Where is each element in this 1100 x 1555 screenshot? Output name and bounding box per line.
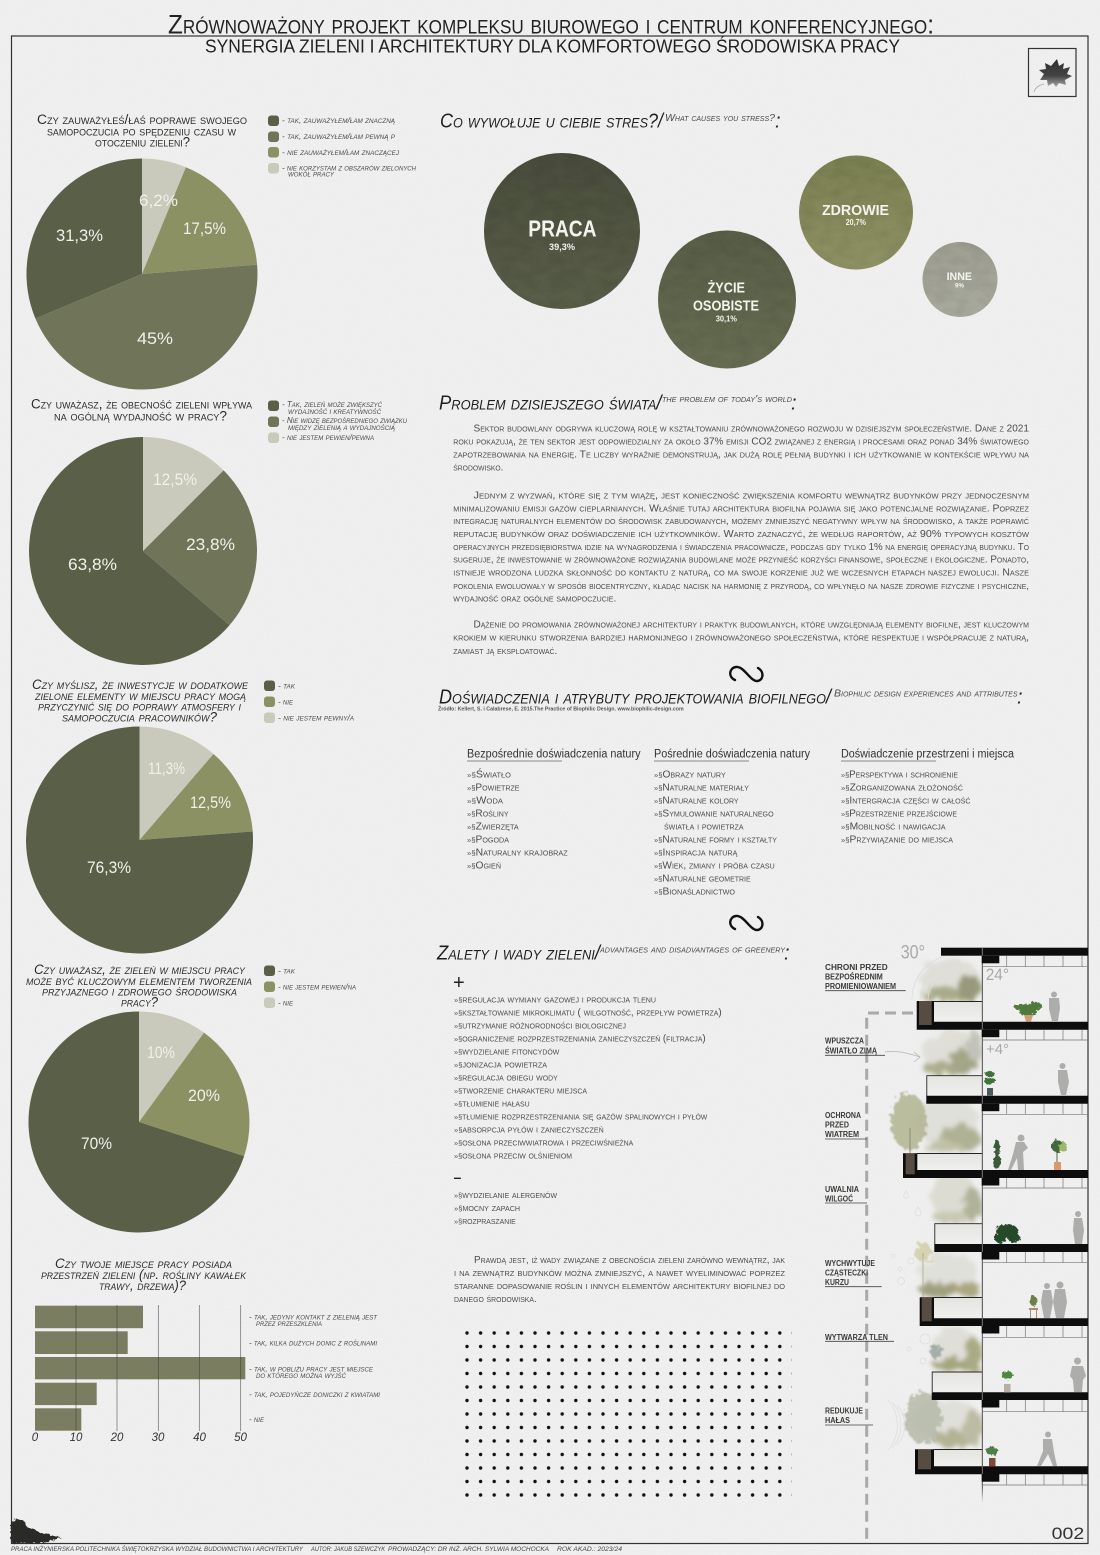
benefit labels: ŚWIATŁO ZIMĄ (825, 1046, 877, 1055)
bar chart labels: - nie (249, 1415, 265, 1424)
benefit labels: UWALNIA (825, 1185, 859, 1194)
bar chart labels: - tak, pojedyńcze doniczki z kwiatami (249, 1390, 380, 1399)
bar chart: 0 (32, 1432, 39, 1444)
minus sign: – (454, 1169, 462, 1185)
list: advantages: »§jonizacja powietrza (454, 1059, 547, 1070)
list: disadvantages: »§rozpraszanie (454, 1216, 516, 1227)
list: direct experiences: »§Naturalny krajobraz (467, 847, 568, 858)
benefit labels: WYTWARZA TLEN (825, 1333, 888, 1342)
text block: problem paragraphs: roku pokazują, że ten sektor jest odpowiedzialny za około 37% emisji CO2 związanej z energią i procesami oraz ponad 34% światowego (453, 436, 1030, 448)
dashed site line (867, 1013, 913, 1543)
bar chart: 30 (152, 1432, 165, 1444)
heading: question 4: pracy? (121, 995, 158, 1010)
bar chart labels: - tak, kilka dużych donic z roślinami (249, 1338, 377, 1347)
pie chart: question 3: 12,5% (190, 793, 231, 812)
list: advantages: »§ograniczenie rozprzestrzeniania zanieczyszczeń (filtracja) (454, 1033, 706, 1044)
dot grid (465, 1326, 792, 1502)
list: indirect experiences (654, 749, 810, 897)
list: indirect experiences: światła i powietrza (664, 821, 744, 832)
text block: problem paragraphs: środowisko. (453, 462, 503, 474)
text block: problem paragraphs: wydajność oraz ogólne samopoczucie. (453, 594, 616, 605)
temperature labels: 30° (901, 942, 925, 963)
icon: leaf in box (1028, 48, 1076, 96)
text block: problem paragraphs: Sektor budowlany odgrywa kluczową rolę w kształtowaniu zrównoważonego rozwoju w dzisiejszym społeczeństwie. Dane z 2021 (474, 424, 1029, 434)
list: direct experiences: »§Ogień (467, 860, 501, 871)
heading: question 3: Czy myślisz, że inwestycje w dodatkowe (32, 677, 249, 692)
climate arcs and particles (885, 956, 945, 1450)
benefit labels: HAŁAS (825, 1416, 851, 1425)
legend: question 1: wokół pracy (288, 170, 335, 178)
heading: problem: the problem of today's world (662, 393, 792, 405)
heading: question 3: zielone elementy w miejscu pracy mogą (34, 688, 246, 703)
legend: question 3: - nie jestem pewny/a (278, 714, 354, 722)
bubble: życie osobiste: ŻYCIE (708, 280, 745, 297)
legend: question 2: - Tak, zieleń może zwiększyć (282, 400, 383, 409)
legend: question 2: między zielenią a wydajnością (288, 423, 395, 432)
heading: question 3: samopoczucia pracowników? (62, 710, 217, 725)
list: disadvantages: »§mocny zapach (454, 1203, 520, 1214)
bubble: zdrowie (799, 156, 913, 270)
panel: biophilic design (438, 686, 1023, 897)
legend: question 2: - nie jestem pewien/pewna (282, 433, 374, 442)
list: advantages: »§tworzenie charakteru miejsca (454, 1085, 587, 1096)
heading: question 1 (37, 112, 247, 150)
list: direct experiences: »§Woda (467, 795, 503, 806)
bubble: praca (484, 153, 640, 309)
icon: infinity divider 2 (730, 916, 762, 930)
list: direct experiences (467, 749, 641, 871)
list: direct experiences: Bezpośrednie doświadczenia natury (467, 749, 641, 761)
list: direct experiences: »§Światło (467, 767, 512, 780)
heading: question 4: może być kluczowym elementem tworzenia (26, 973, 252, 988)
text block: problem paragraphs: sugeruje, że inwestowanie w zrównoważone rozwiązania budowlane może przynieść korzyści finansowe, społeczne i ekologiczne. Ponadto, (453, 555, 1029, 566)
text block: closing paragraph: Prawdą jest, iż wady związane z obecnościa zieleni zarówno wewnątrz, jak (474, 1255, 785, 1266)
text block: problem paragraphs: zamiast ją eksploatować. (453, 646, 557, 657)
footer credits: AUTOR: JAKUB SZEWCZYK (310, 1546, 386, 1553)
list: direct experiences: »§Powietrze (467, 782, 520, 793)
list: indirect experiences: »§Symulowanie naturalnego (654, 808, 774, 819)
bar chart: 50 (234, 1432, 247, 1444)
list: indirect experiences: »§Wiek, zmiany i próba czasu (654, 860, 775, 871)
bubble: inne: 9% (955, 283, 964, 290)
benefit labels: WYCHWYTUJE (825, 1259, 876, 1268)
benefit labels: WIATREM (825, 1130, 859, 1139)
heading: question 4: przyjaznego i zdrowego środowiska (42, 984, 237, 999)
benefit labels (825, 963, 906, 1425)
text block: problem paragraphs: krokiem w kierunku stworzenia bardziej harmonijnego i zrównoważonego społeczeństwa, które respektuje i współpracuje z naturą, (453, 633, 1029, 644)
pie chart: question 2: 63,8% (68, 555, 117, 574)
text block: problem paragraphs: Jednym z wyzwań, które się z tym wiążę, jest konieczność zwiększenia komfortu wewnątrz budynków przy jednoczesnym (474, 490, 1029, 501)
list: indirect experiences: »§Naturalne geometrie (654, 873, 751, 884)
bubble: zdrowie: ZDROWIE (822, 202, 889, 219)
heading: biophilic: : (1017, 686, 1023, 708)
legend: question 3: - tak (278, 682, 296, 690)
legend: question 3 (264, 680, 354, 723)
list: space and place: »§Przestrzenie przejściowe (841, 808, 957, 819)
legend: question 1 (268, 116, 417, 178)
beams and ceilings (982, 956, 1088, 1485)
benefit labels: REDUKUJE (825, 1406, 864, 1415)
pie chart: question 4 (28, 1012, 250, 1233)
list: indirect experiences: »§Inspiracja naturą (654, 847, 738, 858)
temperature labels (901, 942, 1009, 1058)
text block: problem paragraphs: Dążenie do promowania zrównoważonej architektury i praktyk budowlanych, które uwzględniają elementy biofilne, jest kluczowym (474, 619, 1029, 630)
list: indirect experiences: »§Naturalne materiały (654, 782, 749, 793)
bar chart labels (249, 1312, 380, 1424)
heading: stress: What causes you stress? (665, 112, 775, 124)
heading: question 5: trawy, drzewa)? (99, 1278, 186, 1293)
pie chart: question 1: 31,3% (56, 226, 103, 245)
benefit labels: PROMIENIOWANIEM (825, 982, 896, 991)
benefit labels: KURZU (825, 1278, 849, 1287)
balconies and planters (903, 948, 1088, 1474)
pie chart: question 2: 12,5% (153, 470, 197, 489)
legend: question 2: - Nie widzę bezpośredniego związku (282, 416, 408, 425)
text block: closing paragraph: staranne dopasowanie roślin i innych elementów architektury biofilnej do (454, 1281, 786, 1292)
list: indirect experiences: »§Naturalne formy i kształty (654, 834, 777, 845)
legend: question 2: wydajność i kreatywność (288, 407, 382, 416)
legend: question 1: - tak, zauważyłem/łam pewną p (282, 132, 395, 141)
heading: problem (439, 392, 797, 414)
list: advantages: »§utrzymanie różnorodności biologicznej (454, 1020, 626, 1031)
indoor plants (984, 1002, 1067, 1466)
text block: problem paragraphs: pokolenia ewoluowały w sposób biocentryczny, kładąc nacisk na harmonię z przyrodą, co wpłynęło na nasze zdrowie fizyczne i psychiczne, (453, 581, 1029, 592)
icon: infinity divider 1 (730, 667, 762, 681)
list: space and place: Doświadczenie przestrzeni i miejsca (841, 749, 1015, 761)
heading: question 4 (26, 962, 252, 1010)
benefit labels: OCHRONA (825, 1111, 861, 1120)
benefit labels: BEZPOŚREDNIM (825, 973, 883, 982)
text block: problem paragraphs: minimalizowaniu emisji gazów cieplarnianych. Właśnie tutaj architektura biofilna pojawia się jako potencjalne rozwiązanie. Poprzez (453, 503, 1030, 514)
list: space and place (841, 749, 1015, 845)
footer credits: ROK AKAD.: 2023/24 (557, 1546, 622, 1553)
benefit labels: CHRONI PRZED (825, 963, 888, 972)
title: SYNERGIA ZIELENI I ARCHITEKTURY DLA KOMFORTOWEGO ŚRODOWISKA PRACY (205, 36, 900, 56)
plus sign: + (453, 972, 465, 994)
heading: question 2 (31, 397, 252, 424)
temperature labels: +4° (986, 1041, 1009, 1058)
panel: question 3 pie (26, 677, 354, 954)
list: indirect experiences: »§Naturalne kolory (654, 795, 739, 806)
heading: question 4: Czy uważasz, że zieleń w miejscu pracy (34, 962, 246, 977)
bar chart: 40 (193, 1432, 206, 1444)
list: advantages: »§absorpcja pyłów i zanieczyszczeń (454, 1124, 604, 1135)
footer credits: PROWADZĄCY: DR INŻ. ARCH. SYLWIA MOCHOCKA (388, 1545, 550, 1553)
bar chart labels: - tak, w pobliżu pracy jest miejsce (249, 1364, 374, 1373)
legend: question 4: - nie jestem pewien/na (278, 982, 356, 992)
heading: question 1: Czy zauważyłeś/łaś poprawe swojego (37, 112, 247, 127)
benefit labels: PRZED (825, 1121, 849, 1130)
text block: problem paragraphs: integrację naturalnych elementów do środowisk zabudowanych, możemy zmniejszyć negatywny wpływ na środowisko, a także poprawić (453, 516, 1029, 527)
panel: question 2 pie (29, 397, 408, 665)
text block: closing paragraph (454, 1255, 786, 1305)
list: disadvantages (454, 1190, 557, 1227)
benefit labels: WILGOĆ (825, 1195, 853, 1204)
footer credits (11, 1544, 622, 1553)
pie chart: question 3: 76,3% (87, 858, 131, 877)
title: Zrównoważony projekt kompleksu biurowego i centrum konferencyjnego: (168, 10, 934, 40)
heading: question 5: przestrzeń zieleni (np. rośliny kawałek (41, 1267, 247, 1282)
bubble: życie osobiste (658, 230, 796, 368)
heading: question 1: otoczeniu zieleni? (95, 135, 190, 150)
text block: problem paragraphs: istnieje wrodzona ludzka skłonność do kontaktu z naturą, co ma swoje korzenie już we wczesnych etapach naszej ewolucji. Nasze (453, 568, 1029, 579)
glass wall (982, 948, 983, 1503)
panel: problem of today's world (439, 392, 1030, 657)
list: space and place: »§Mobilność i nawigacja (841, 821, 946, 832)
heading: question 3 (32, 677, 249, 725)
list: advantages (454, 994, 722, 1161)
source note: Źródło: Kellert, S. i Calabrese, E. 2015.The Practice of Biophilic Design. www.biophilic-design.com (438, 705, 684, 713)
text block: closing paragraph: danego środowiska. (454, 1294, 537, 1305)
pie chart: question 2: 23,8% (186, 535, 235, 554)
heading: question 3: przyczynić się do poprawy atmosfery i (38, 699, 241, 714)
bubble: zdrowie: 20,7% (846, 218, 866, 227)
bubble: praca: 39,3% (549, 242, 575, 252)
heading: question 1: samopoczucia po spędzeniu czasu w (47, 124, 236, 139)
list: space and place: »§Perspektywa i schronienie (841, 769, 958, 780)
vegetation (891, 958, 983, 1448)
title (168, 10, 934, 56)
pie chart: question 3: 11,3% (148, 759, 185, 778)
list: space and place: »§Przywiązanie do miejsca (841, 834, 953, 845)
bar chart: 10 (70, 1432, 83, 1444)
bubble: inne: INNE (947, 271, 972, 283)
list: disadvantages: »§wydzielanie alergenów (454, 1190, 557, 1201)
pie chart: question 1: 6,2% (139, 191, 178, 210)
heading: problem: : (791, 392, 797, 414)
panel: question 5 bar chart (32, 1256, 380, 1444)
panel: stress causes (440, 110, 998, 369)
heading: stress: : (775, 110, 781, 132)
text block: problem paragraphs: reputację budynków oraz doświadczenie ich użytkowników. Warto zaznaczyć, że według raportów, aż 90% typowych kosztów (453, 529, 1029, 540)
heading: biophilic: Biophilic design experiences and attributes (834, 688, 1018, 700)
benefit labels: CZĄSTECZKI (825, 1268, 868, 1277)
list: indirect experiences: »§Obrazy natury (654, 769, 726, 780)
legend: question 1: - nie zauważyłem/łam znaczącej (282, 148, 400, 157)
temperature labels: 24° (986, 965, 1009, 984)
text block: problem paragraphs (453, 424, 1030, 657)
bar chart labels: - tak, jedyny kontakt z zielenią jest (249, 1312, 378, 1321)
bar chart labels: przez przeszklenia (256, 1319, 322, 1328)
bar chart (32, 1305, 247, 1444)
legend: question 4 (264, 966, 356, 1008)
heading: stress: Co wywołuje u ciebie stres?/ (440, 110, 665, 132)
pie chart: question 4: 10% (147, 1043, 175, 1062)
legend: question 3: - nie (278, 698, 294, 706)
text block: problem paragraphs: operacyjnych przedsiębiorstwa idzie na wynagrodzenia i świadczenia pracownicze, podczas gdy tylko 1% na energię operacyjną budynku. To (453, 542, 1030, 553)
list: direct experiences: »§Rośliny (467, 808, 509, 819)
heading: question 2: na ogólną wydajność w pracy? (54, 409, 227, 424)
list: advantages: »§wydzielanie fitoncydów (454, 1046, 560, 1057)
list: direct experiences: »§Zwierzęta (467, 821, 519, 832)
heading: advantages: : (784, 943, 790, 965)
pie chart: question 3 (26, 726, 253, 954)
bubble: inne (922, 242, 998, 317)
pie chart: question 1 (26, 158, 257, 389)
legend: question 1: - tak, zauważyłem/łam znaczną (282, 116, 395, 125)
footer credits: PRACA INŻYNIERSKA POLITECHNIKA ŚWIĘTOKRZYSKA WYDZIAŁ BUDOWNICTWA I ARCHITEKTURY (11, 1544, 304, 1553)
pie chart: question 4: 20% (188, 1086, 220, 1105)
heading: advantages (436, 943, 790, 965)
pie chart: question 4: 70% (81, 1134, 112, 1153)
icon: tree silhouette (11, 1519, 62, 1543)
list: advantages: »§osłona przeciwwiatrowa i przeciwśnieżna (454, 1137, 634, 1148)
bar chart: 20 (110, 1432, 124, 1444)
legend: question 1: - nie korzystam z obszarów zielonych (282, 164, 417, 172)
pie chart: question 2 (29, 437, 257, 665)
list: advantages: »§tłumienie rozprzestrzeniania się gazów spalinowych i pyłów (454, 1111, 708, 1122)
bubble: życie osobiste: OSOBISTE (693, 299, 759, 315)
bar chart labels: do którego można wyjść (256, 1371, 347, 1380)
people silhouettes (1008, 992, 1086, 1466)
panel: question 1 pie (26, 112, 417, 389)
list: indirect experiences: Pośrednie doświadczenia natury (654, 749, 810, 761)
benefit labels: WPUSZCZA (825, 1037, 864, 1046)
legend: question 4: - tak (278, 966, 296, 976)
list: direct experiences: »§Pogoda (467, 834, 509, 845)
bubble: życie osobiste: 30,1% (716, 315, 737, 324)
pie chart: question 1: 45% (137, 329, 173, 348)
legend: question 4: - nie (278, 998, 294, 1008)
heading: biophilic: Doświadczenia i atrybuty projektowania biofilnego/ (439, 686, 833, 708)
list: space and place: »§Intergracja części w całość (841, 795, 970, 806)
heading: advantages: advantages and disadvantages of greenery (599, 944, 786, 956)
heading: problem: Problem dzisiejszego świata/ (439, 392, 664, 414)
list: advantages: »§regulacja obiegu wody (454, 1072, 558, 1083)
bubble: praca: PRACA (528, 216, 596, 242)
legend: question 2 (268, 400, 408, 443)
list: indirect experiences: »§Bionaśladnictwo (654, 886, 736, 897)
heading: question 5: Czy twoje miejsce pracy posiada (55, 1256, 232, 1271)
list: space and place: »§Zorganizowana złożoność (841, 782, 963, 793)
panel: section diagram of green facade (825, 942, 1088, 1543)
list: advantages: »§osłona przeciw olśnieniom (454, 1150, 572, 1161)
heading: question 5 (41, 1256, 247, 1293)
list: advantages: »§kształtowanie mikroklimatu ( wilgotność, przepływ powietrza) (454, 1007, 722, 1018)
heading: question 2: Czy uważasz, że obecność zieleni wpływa (31, 397, 252, 412)
text block: problem paragraphs: zapotrzebowania na energię. Te liczby wyraźnie demonstrują, jak dużą rolę pełnią budynki i ich użytkowanie w kontekście wpływu na (453, 450, 1029, 460)
list: advantages: »§regulacja wymiany gazowej i produkcja tlenu (454, 994, 656, 1005)
list: advantages: »§tłumienie hałasu (454, 1098, 530, 1109)
heading: advantages: Zalety i wady zieleni/ (436, 943, 602, 965)
panel: question 4 pie (26, 962, 356, 1233)
text block: closing paragraph: i na zewnątrz budynków można zmniejszyć, a nawet wyeliminować poprzez (454, 1268, 786, 1279)
panel: advantages and disadvantages (436, 943, 790, 1305)
page number: 002 (1052, 1524, 1084, 1543)
pie chart: question 1: 17,5% (183, 219, 226, 238)
